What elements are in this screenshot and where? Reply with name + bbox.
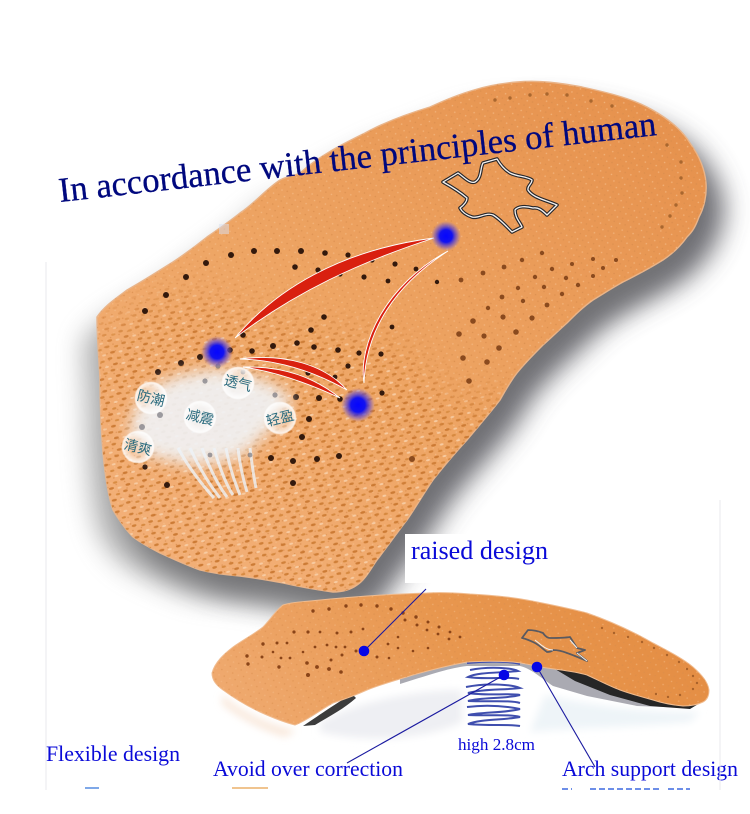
pale blue smudge at edge: [219, 224, 229, 234]
blue points: [201, 221, 461, 422]
label: high 2.8cm: high 2.8cm: [458, 735, 535, 754]
leather grain: [212, 593, 709, 725]
red force arcs: [235, 238, 448, 398]
lower insole: [212, 593, 709, 725]
toe-side holes: [409, 251, 618, 462]
lower leather logo: [522, 630, 587, 661]
logo highlight: [443, 159, 557, 232]
drop shadow of upper insole: [68, 84, 742, 624]
pale floor reflection: [222, 690, 700, 739]
leather logo: [443, 159, 557, 232]
title: In accordance with the principles of human: [57, 104, 658, 210]
perforated toe edge: [493, 92, 684, 229]
label: raised design: raised design: [411, 536, 548, 565]
white air cloud: [130, 369, 291, 498]
black sole strip: [550, 666, 700, 709]
lower logo highlight: [535, 640, 587, 661]
label: raised design: [405, 534, 555, 583]
pointer dots: [359, 646, 542, 680]
heel stitching: [601, 627, 698, 698]
forefoot perforation texture: [98, 278, 510, 591]
bubbles: 防潮: [135, 387, 167, 409]
perforations: [245, 603, 461, 677]
gray holes through cloud: [139, 363, 278, 457]
white mask over the top-left of the shadow: [0, 0, 750, 262]
spring: [466, 662, 520, 726]
ventilation holes: [142, 248, 439, 488]
label: avoid over correction: Avoid over correction: [213, 756, 403, 781]
leather grain: [97, 81, 706, 592]
gray underside: [400, 655, 690, 708]
bubbles: 轻盈: [264, 407, 296, 429]
bubbles: 清爽: [122, 436, 154, 458]
pointer lines: [347, 589, 595, 767]
bubbles: 减震: [184, 406, 216, 428]
upper insole: [80, 81, 706, 620]
label: flexible design: Flexible design: [46, 741, 180, 766]
left dark sole sliver: [303, 694, 356, 726]
label: arch support design: Arch support design: [562, 756, 738, 781]
bubbles: [122, 366, 296, 464]
bubbles: 透气: [222, 372, 254, 394]
insole body: [212, 593, 709, 725]
insole body: [97, 81, 706, 592]
